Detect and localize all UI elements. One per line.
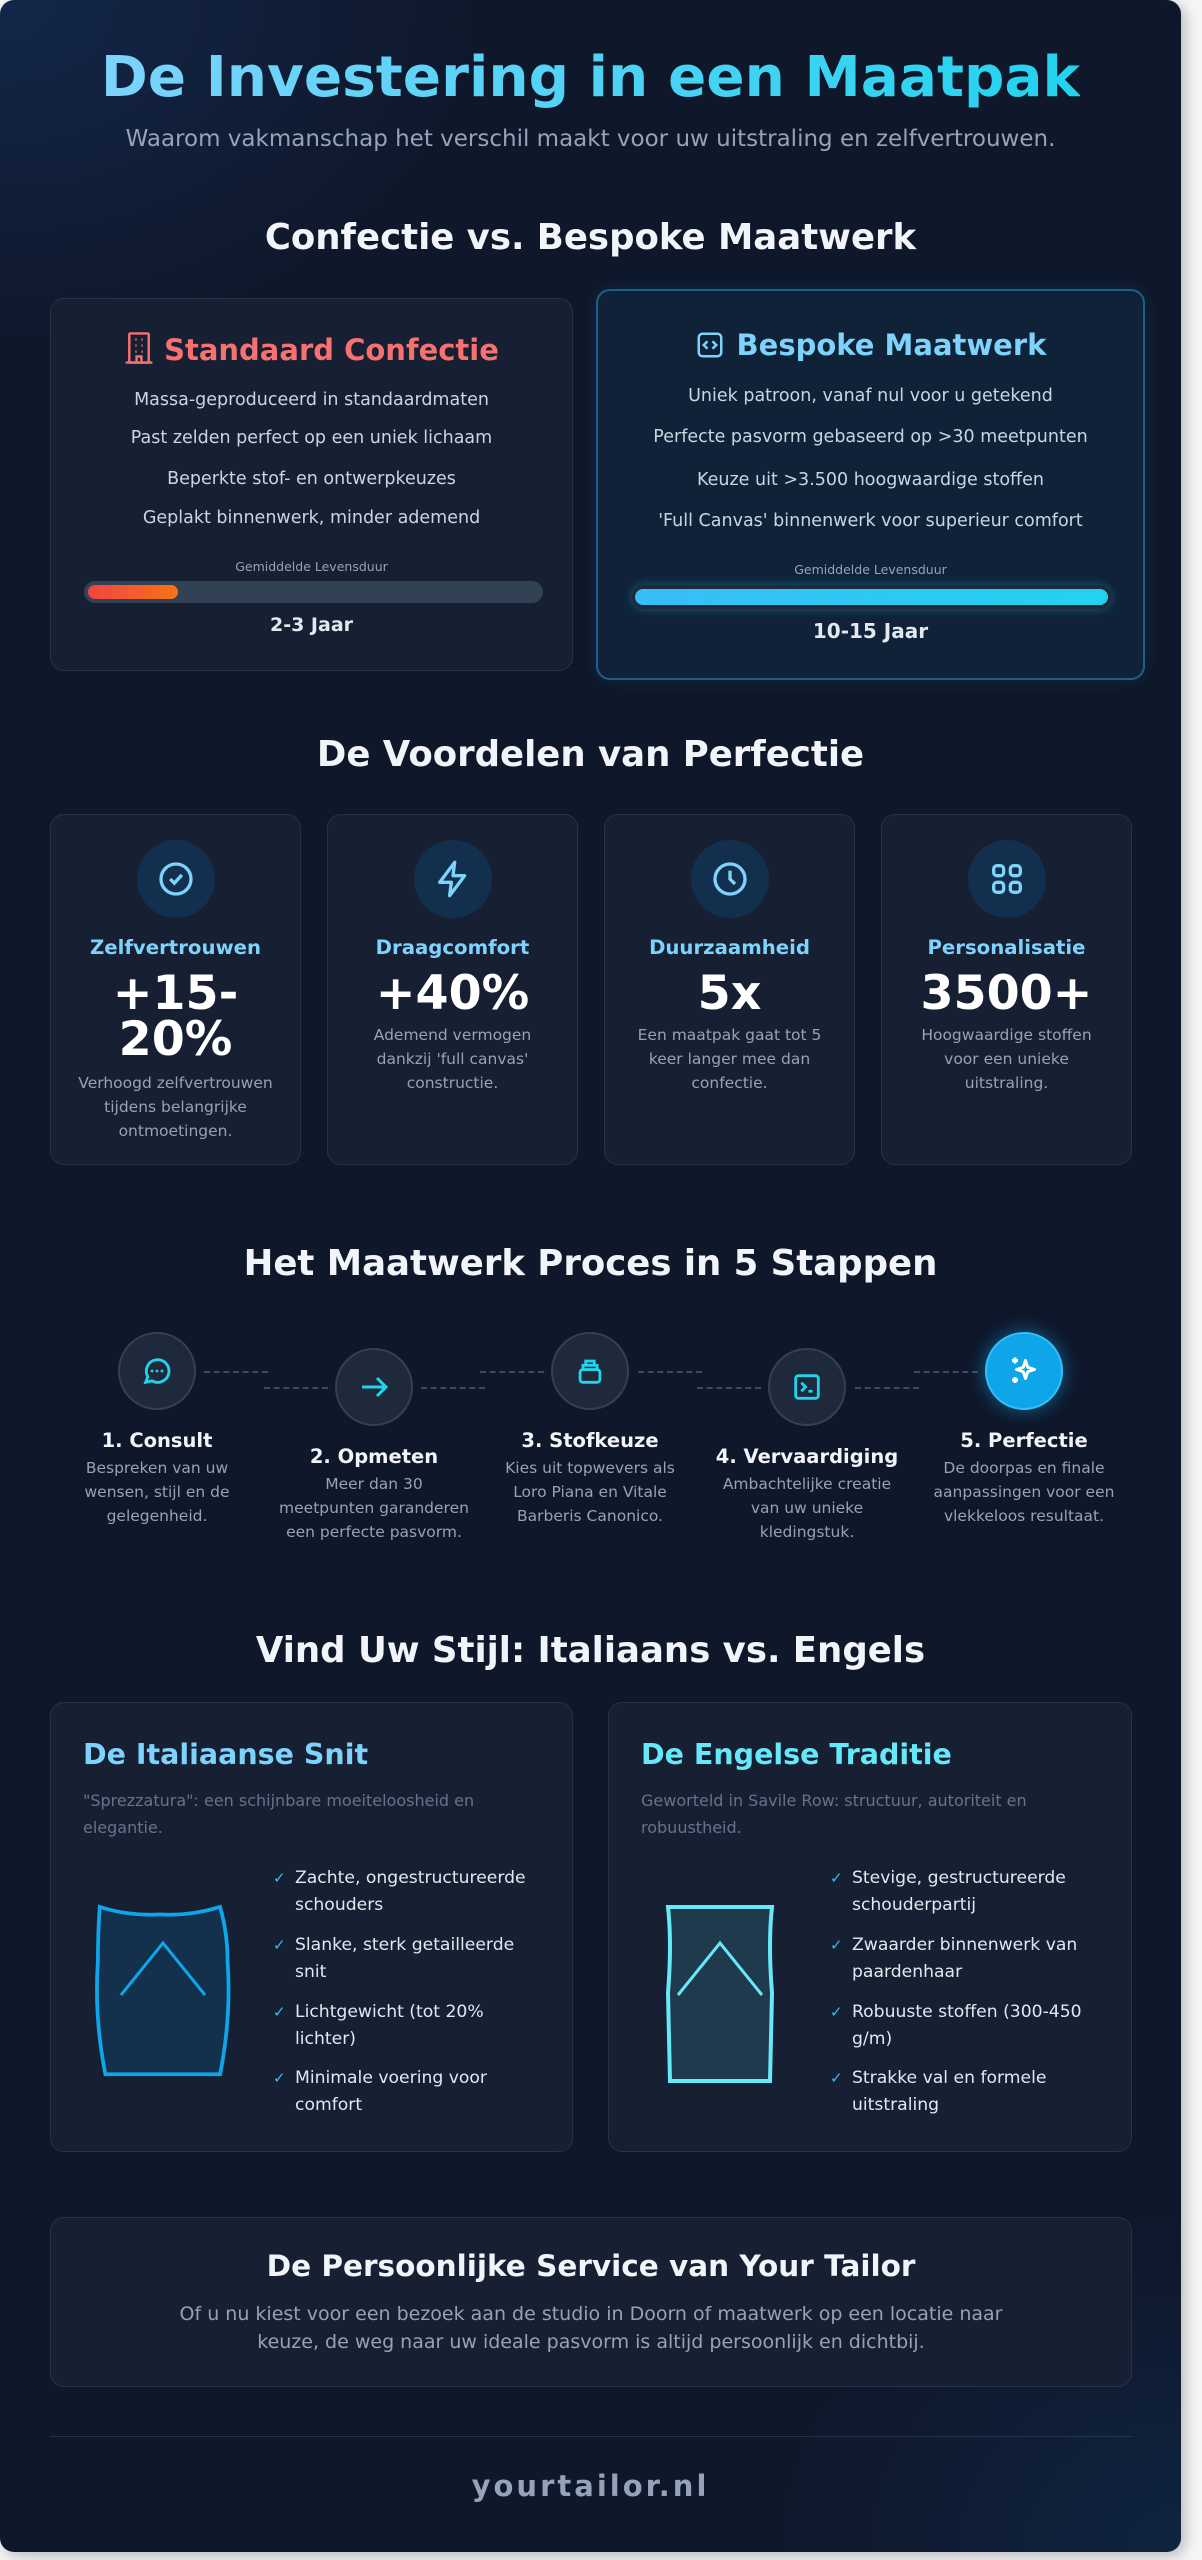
- panel: italiaanse snit: ✓: [273, 1869, 286, 1887]
- panel: standaard confectie: Gemiddelde Levensduur: [235, 559, 388, 574]
- step 5: [934, 1320, 1114, 1525]
- step 2: Meer dan 30: [325, 1475, 423, 1493]
- stat card: zelfvertrouwen: +15-: [113, 966, 238, 1021]
- stat card: personalisatie: Hoogwaardige stoffen voor een unieke uitstraling.: [921, 1026, 1092, 1092]
- subtitle: Waarom vakmanschap het verschil maakt voor uw uitstraling en zelfvertrouwen.: [126, 126, 1055, 152]
- stat card: duurzaamheid: Duurzaamheid: [649, 936, 810, 959]
- panel: engelse traditie: De Engelse Traditie: [641, 1738, 952, 1771]
- panel: engelse traditie: Geworteld in Savile Row: structuur, autoriteit en robuustheid.: [641, 1791, 1027, 1837]
- step 2: een perfecte pasvorm.: [286, 1523, 462, 1541]
- step 4: [716, 1348, 898, 1541]
- heading: stijl: Vind Uw Stijl: Italiaans vs. Engels: [256, 1630, 925, 1671]
- step 5: De doorpas en finale aanpassingen voor een vlekkeloos resultaat.: [934, 1459, 1114, 1525]
- panel: bespoke maatwerk: [596, 289, 1145, 680]
- step 4: 4. Vervaardiging: [716, 1445, 898, 1468]
- panel: engelse traditie: ✓: [830, 2003, 843, 2021]
- panel: standaard confectie: Beperkte stof- en ontwerpkeuzes: [167, 469, 456, 489]
- icon: stack: [551, 1332, 629, 1410]
- panel: italiaanse snit: Minimale voering voor comfort: [295, 2068, 487, 2115]
- panel: engelse traditie: ✓: [830, 1869, 843, 1887]
- stat card: draagcomfort: [327, 814, 578, 1165]
- heading: standaard confectie: Standaard Confectie: [164, 333, 499, 367]
- panel: standaard confectie: [50, 298, 573, 671]
- panel: engelse traditie: ✓: [830, 2069, 843, 2087]
- footer: website: yourtailor.nl: [472, 2469, 709, 2503]
- panel: bespoke maatwerk: Gemiddelde Levensduur: [794, 562, 947, 577]
- panel: bespoke maatwerk: Perfecte pasvorm gebaseerd op >30 meetpunten: [653, 427, 1088, 447]
- heading: voordelen: De Voordelen van Perfectie: [317, 734, 864, 775]
- list: Massa-geproduceerd in standaardmaten: [134, 390, 489, 410]
- stat card: personalisatie: 3500+: [920, 966, 1092, 1021]
- checklist: Zachte, ongestructureerde schouders: [295, 1868, 526, 1915]
- panel: persoonlijke service: keuze, de weg naar uw ideale pasvorm is altijd persoonlijk en dichtbij.: [257, 2331, 925, 2353]
- panel: engelse traditie: Stevige, gestructureerde schouderpartij: [852, 1868, 1066, 1915]
- step 2: 2. Opmeten: [310, 1445, 438, 1468]
- icon: lightning: [414, 840, 492, 918]
- step 3: Kies uit topwevers als Loro Piana en Vitale Barberis Canonico.: [505, 1459, 675, 1525]
- panel: engelse traditie: ✓: [830, 1936, 843, 1954]
- panel: bespoke maatwerk: Uniek patroon, vanaf nul voor u getekend: [688, 386, 1053, 406]
- stat card: zelfvertrouwen: 20%: [119, 1012, 232, 1067]
- description: "Sprezzatura": een schijnbare moeiteloosheid en elegantie.: [83, 1791, 474, 1837]
- icon: terminal: [768, 1348, 846, 1426]
- step 3: 3. Stofkeuze: [521, 1429, 659, 1452]
- panel: italiaanse snit: Lichtgewicht (tot 20% lichter): [295, 2002, 484, 2049]
- step 3: [505, 1332, 675, 1525]
- icon: clock: [690, 840, 768, 918]
- stat card: draagcomfort: Ademend vermogen dankzij 'full canvas' constructie.: [374, 1026, 531, 1092]
- panel: bespoke maatwerk: Keuze uit >3.500 hoogwaardige stoffen: [697, 470, 1044, 490]
- stat card: zelfvertrouwen: [50, 814, 301, 1165]
- step 2: meetpunten garanderen: [279, 1499, 469, 1517]
- step 1: 1. Consult: [102, 1429, 212, 1452]
- panel: bespoke maatwerk: 'Full Canvas' binnenwerk voor superieur comfort: [658, 511, 1083, 531]
- stat card: draagcomfort: Draagcomfort: [376, 936, 529, 959]
- icon: grid: [968, 840, 1046, 918]
- step 1: [84, 1332, 230, 1525]
- stat card: duurzaamheid: Een maatpak gaat tot 5 keer langer mee dan confectie.: [638, 1026, 821, 1092]
- panel: italiaanse snit: ✓: [273, 2003, 286, 2021]
- panel: persoonlijke service: De Persoonlijke Service van Your Tailor: [267, 2249, 915, 2283]
- stat card: zelfvertrouwen: Zelfvertrouwen: [90, 936, 261, 959]
- panel: standaard confectie: Geplakt binnenwerk, minder ademend: [143, 508, 480, 528]
- icon: sparkle: [985, 1332, 1063, 1410]
- step 1: Bespreken van uw wensen, stijl en de gelegenheid.: [84, 1459, 230, 1525]
- stat card: duurzaamheid: [604, 814, 855, 1165]
- panel: standaard confectie: 2-3 Jaar: [270, 614, 353, 636]
- stat card: draagcomfort: +40%: [376, 966, 529, 1021]
- panel: standaard confectie: Past zelden perfect op een uniek lichaam: [131, 428, 492, 448]
- step 2: [279, 1348, 469, 1541]
- icon: check circle: [136, 840, 214, 918]
- heading: bespoke: Bespoke Maatwerk: [737, 328, 1046, 362]
- stat card: duurzaamheid: 5x: [698, 966, 761, 1021]
- step 4: Ambachtelijke creatie van uw unieke kledingstuk.: [723, 1475, 891, 1541]
- stat card: personalisatie: [881, 814, 1132, 1165]
- stat card: personalisatie: Personalisatie: [927, 936, 1086, 959]
- step 5: 5. Perfectie: [960, 1429, 1088, 1452]
- heading: proces: Het Maatwerk Proces in 5 Stappen: [244, 1243, 937, 1284]
- panel: engelse traditie: Zwaarder binnenwerk van paardenhaar: [852, 1935, 1077, 1982]
- panel: engelse traditie: Strakke val en formele uitstraling: [852, 2068, 1046, 2115]
- bar: lifespan bespoke: [632, 585, 1111, 609]
- panel: engelse traditie: Robuuste stoffen (300-450 g/m): [852, 2002, 1082, 2049]
- icon: arrow: [335, 1348, 413, 1426]
- panel: italiaanse snit: ✓: [273, 2069, 286, 2087]
- heading: De Italiaanse Snit: [83, 1738, 368, 1771]
- heading: confectie vs bespoke: Confectie vs. Bespoke Maatwerk: [265, 217, 916, 258]
- panel: persoonlijke service: Of u nu kiest voor een bezoek aan de studio in Doorn of maatwerk op een locatie naar: [180, 2303, 1002, 2325]
- dashed connectors: [204, 1371, 268, 1373]
- panel: engelse traditie: [608, 1702, 1132, 2152]
- panel: italiaanse snit: Slanke, sterk getailleerde snit: [295, 1935, 514, 1982]
- icon: soft jacket: [95, 1904, 230, 2076]
- stat card: zelfvertrouwen: Verhoogd zelfvertrouwen tijdens belangrijke ontmoetingen.: [78, 1074, 273, 1140]
- icon: chat: [118, 1332, 196, 1410]
- bar: lifespan: [84, 581, 543, 603]
- icon: structured jacket: [666, 1905, 774, 2083]
- title: De Investering in een Maatpak: [101, 45, 1080, 110]
- panel: italiaanse snit: [50, 1702, 573, 2152]
- panel: italiaanse snit: ✓: [273, 1936, 286, 1954]
- panel: persoonlijke service: [50, 2217, 1132, 2387]
- panel: bespoke maatwerk: 10-15 Jaar: [813, 619, 928, 643]
